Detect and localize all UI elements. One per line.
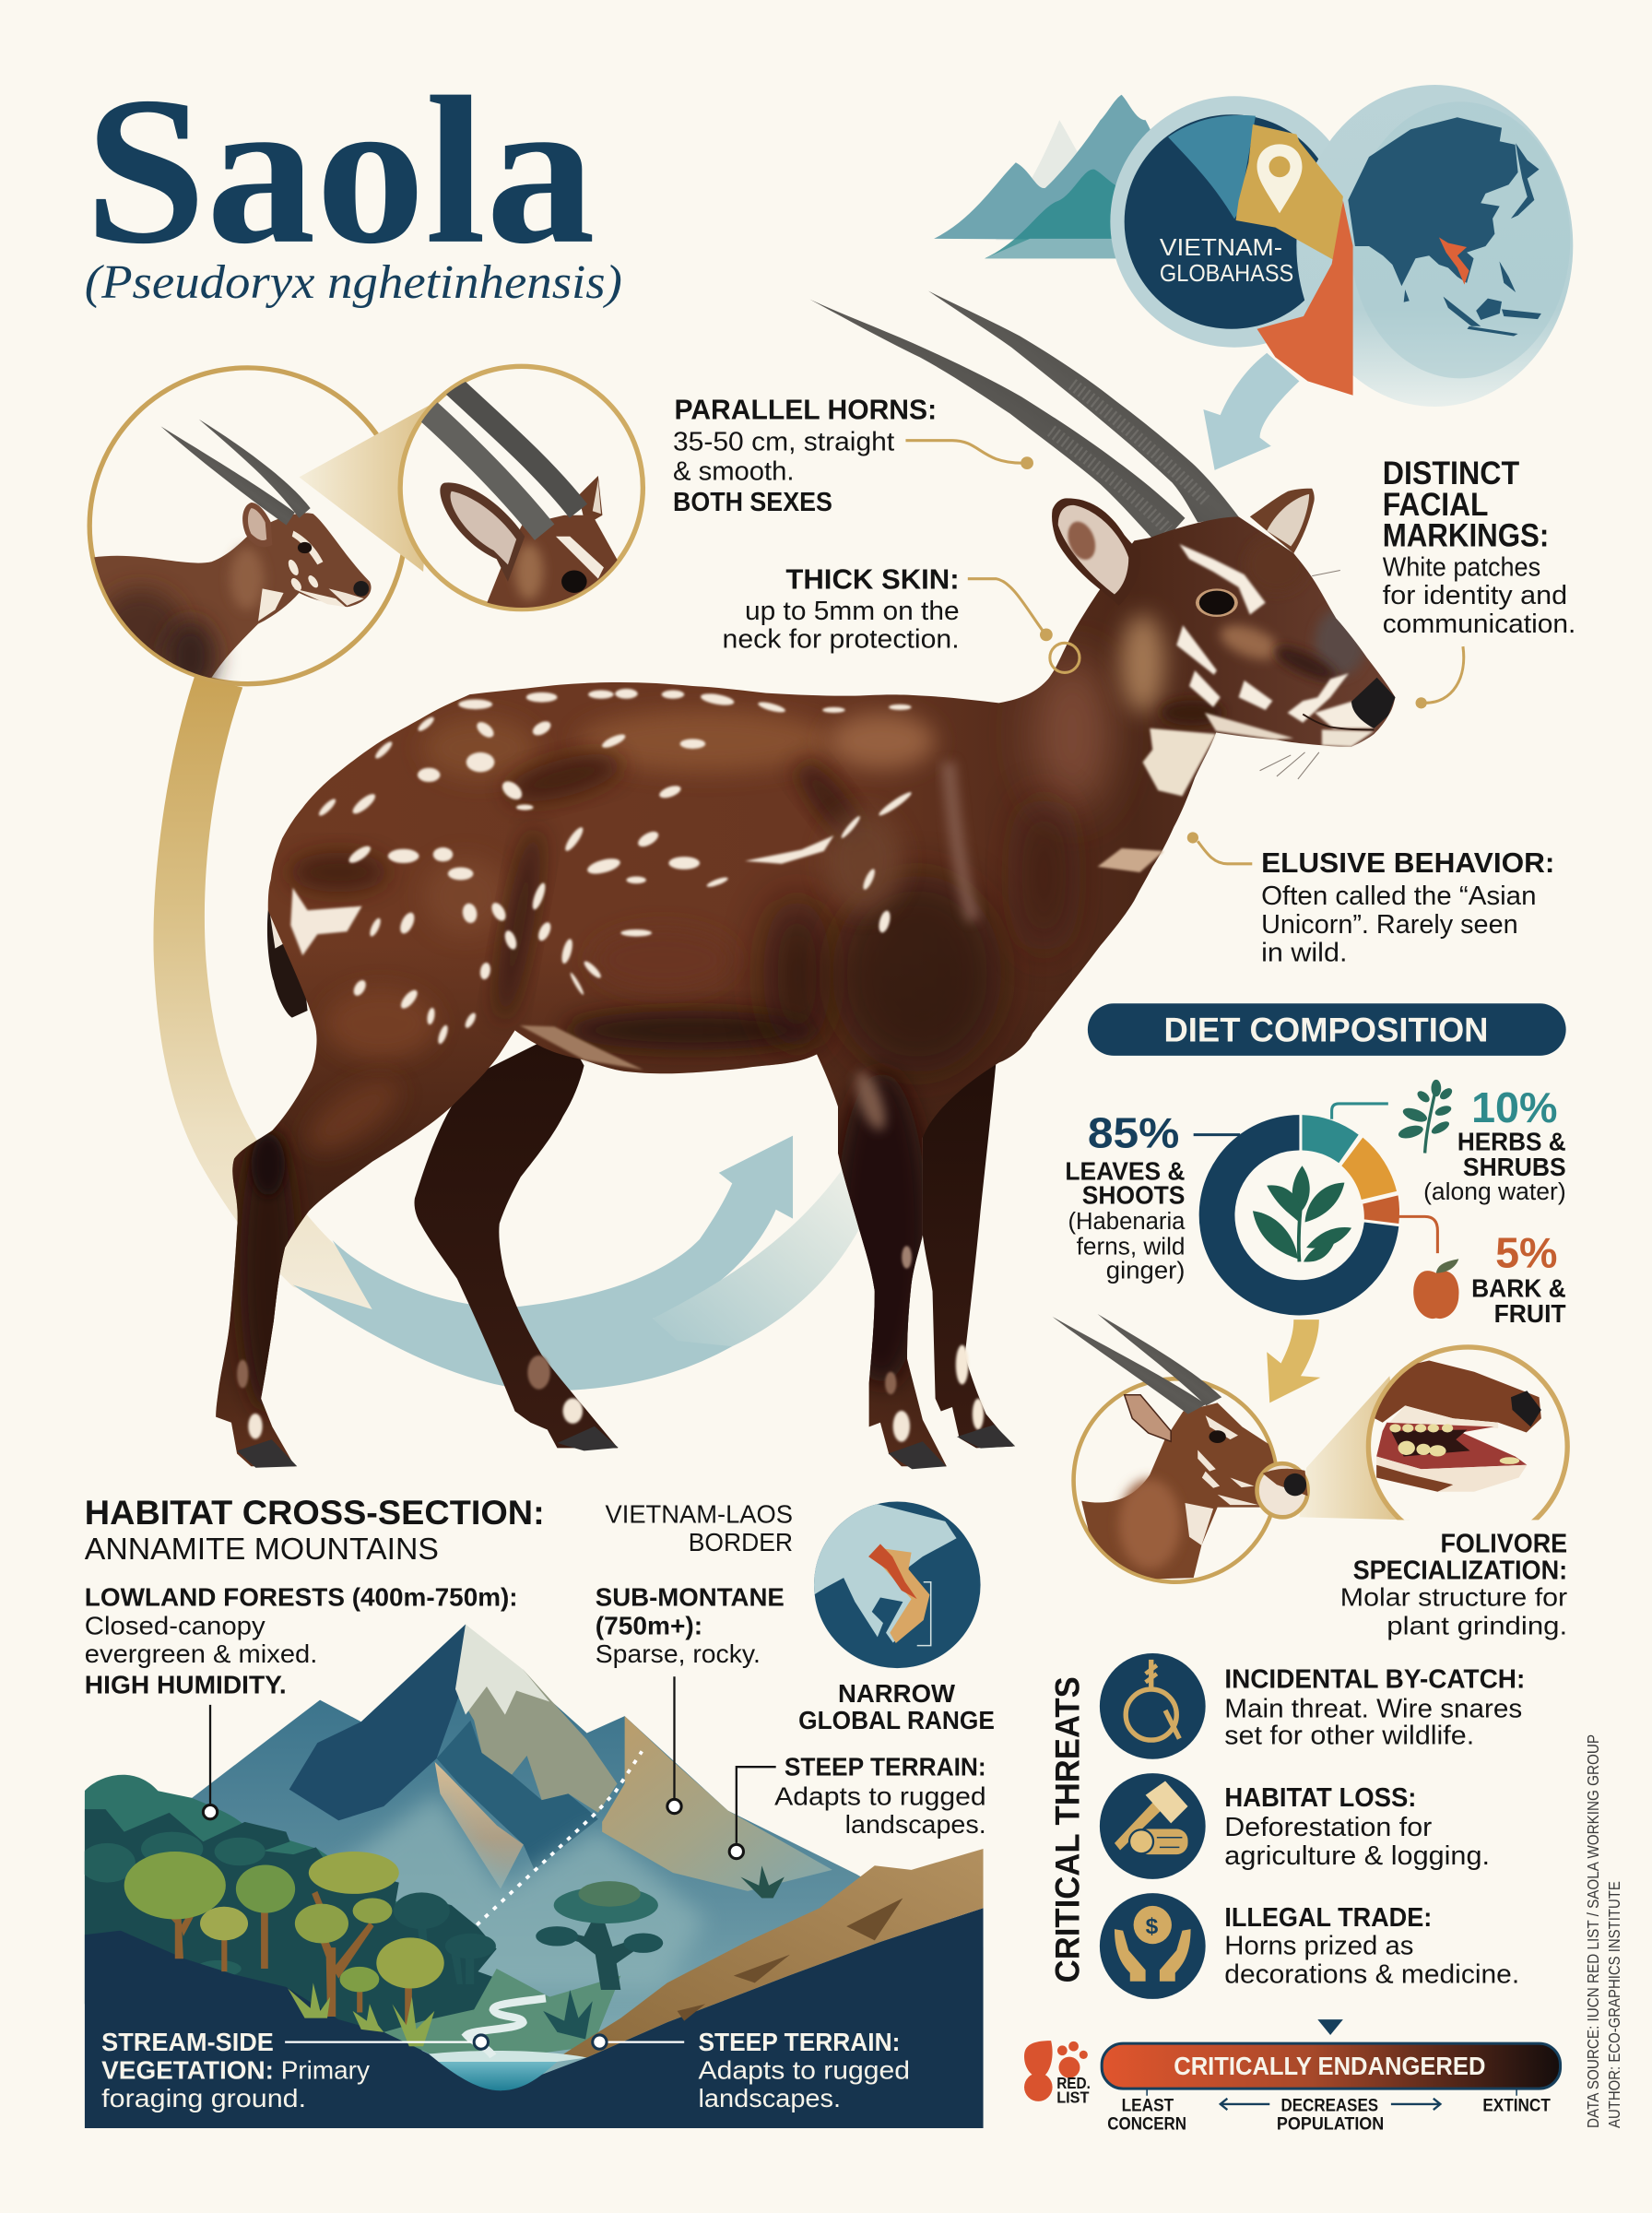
subtitle: scientific name: (Pseudoryx nghetinhensis) — [85, 256, 622, 309]
panel: habitat headings: HABITAT CROSS-SECTION: — [85, 1494, 545, 1532]
callout: folivore specialization: FOLIVORE — [1440, 1530, 1567, 1559]
icon: leaves in donut — [1253, 1166, 1351, 1262]
threat: illegal trade: Horns prized as — [1224, 1932, 1413, 1961]
callout: elusive behavior: Unicorn”. Rarely seen — [1261, 910, 1518, 940]
land on map — [814, 1501, 957, 1646]
callout: steep terrain upper — [729, 1752, 986, 1859]
tan right slope — [602, 1716, 832, 1891]
main saola illustration — [197, 290, 1395, 1482]
water pale shelf — [429, 2051, 587, 2062]
rock shadows — [678, 1899, 903, 2021]
label: 10% herbs and shrubs: HERBS & — [1457, 1127, 1566, 1155]
callout: parallel horns: PARALLEL HORNS: — [674, 395, 937, 426]
leg markings — [237, 1246, 984, 1442]
callout: folivore specialization — [1340, 1530, 1567, 1639]
callout: thick skin: THICK SKIN: — [785, 563, 960, 595]
back forest — [85, 1774, 396, 2005]
lake — [439, 2062, 557, 2090]
icon: herb — [1397, 1080, 1454, 1154]
horns in circle — [160, 420, 311, 526]
label: narrow global range: NARROW — [838, 1679, 955, 1708]
locator map: narrow global range — [814, 1501, 981, 1668]
callout: stream-side vegetation: VEGETATION: Primary — [101, 2055, 370, 2084]
callout: elusive behavior — [1187, 832, 1554, 967]
circle frame — [89, 368, 406, 684]
threat: illegal trade: ILLEGAL TRADE: — [1224, 1903, 1432, 1933]
diet heading pill — [1088, 1003, 1566, 1056]
icon: red list logo: LIST — [1056, 2088, 1090, 2106]
callout: distinct facial markings: for identity and — [1383, 581, 1567, 610]
habitat scene illustration — [79, 1625, 984, 2128]
map graphic: Vietnam global location — [934, 85, 1573, 407]
callout: steep terrain lower: STEEP TERRAIN: — [699, 2028, 900, 2056]
callout: parallel horns: BOTH SEXES — [673, 488, 832, 517]
arrow: globe down to saola — [1203, 353, 1299, 470]
main mountain — [85, 1625, 984, 2128]
label: 85% leaves and shoots: ferns, wild — [1077, 1233, 1185, 1260]
panel: habitat headings — [85, 1494, 793, 1567]
callout: elusive behavior: ELUSIVE BEHAVIOR: — [1261, 847, 1554, 879]
scale labels: EXTINCT — [1482, 2097, 1551, 2116]
label: 85% leaves and shoots — [1065, 1108, 1240, 1284]
orange slice — [1257, 201, 1353, 396]
diet heading pill: DIET COMPOSITION — [1164, 1012, 1488, 1049]
threat: habitat loss: HABITAT LOSS: — [1224, 1783, 1416, 1813]
threat: by-catch: Main threat. Wire snares — [1224, 1695, 1522, 1724]
callout: distinct facial markings: communication. — [1383, 609, 1575, 639]
credits — [1584, 1734, 1623, 2128]
scale labels: LEAST — [1122, 2097, 1174, 2116]
credits: DATA SOURCE: IUCN RED LIST / SAOLA WORKING GROUP — [1584, 1734, 1602, 2128]
threat: illegal trade — [1100, 1893, 1519, 1999]
callout: lowland forests: LOWLAND FORESTS (400m-750m): — [85, 1583, 518, 1612]
callout: distinct facial markings — [1383, 456, 1575, 708]
callout: folivore specialization: SPECIALIZATION: — [1353, 1556, 1567, 1586]
vertical heading: CRITICAL THREATS — [1049, 1676, 1087, 1982]
label: 5% bark and fruit: FRUIT — [1494, 1299, 1566, 1328]
map label: VIETNAM- — [1160, 233, 1282, 261]
callout: steep terrain lower: Adapts to rugged — [699, 2055, 910, 2084]
status bar: critically endangered: CRITICALLY ENDANGERED — [1174, 2052, 1485, 2080]
tan spur — [435, 1762, 524, 1889]
scale labels — [1107, 2089, 1551, 2134]
callout: thick skin: neck for protection. — [723, 625, 960, 655]
hooves — [237, 1425, 1015, 1469]
threat: illegal trade: $ — [1146, 1914, 1159, 1939]
far front leg — [923, 988, 1037, 1448]
zoom wedge to teeth — [1299, 1376, 1410, 1520]
Vietnam highlight — [1439, 237, 1469, 285]
forest canopy blobs — [79, 1832, 266, 1977]
horns — [809, 290, 1239, 546]
eye — [1196, 588, 1238, 617]
callout: thick skin: up to 5mm on the — [745, 597, 960, 626]
donut chart — [1199, 1115, 1399, 1315]
label: narrow global range: GLOBAL RANGE — [798, 1706, 995, 1734]
label: 10% herbs and shrubs: (along water) — [1423, 1178, 1566, 1205]
callout: stream-side vegetation: foraging ground. — [101, 2084, 306, 2112]
circle frame — [400, 366, 643, 609]
body shading — [197, 537, 1365, 1482]
scale labels: POPULATION — [1277, 2114, 1384, 2134]
body silhouette — [216, 516, 1395, 1466]
snow — [455, 1625, 549, 1715]
icon: red list logo: RED. — [1056, 2074, 1091, 2092]
label: 10% herbs and shrubs: 10% — [1471, 1083, 1557, 1131]
label: 85% leaves and shoots: 85% — [1088, 1108, 1179, 1156]
panel: habitat headings: ANNAMITE MOUNTAINS — [85, 1533, 439, 1567]
map label: GLOBAHASS — [1160, 259, 1293, 287]
stream — [466, 1998, 546, 2056]
callout: stream-side vegetation — [101, 2028, 488, 2112]
label: 85% leaves and shoots: LEAVES & — [1065, 1157, 1186, 1186]
panel: diet composition — [1065, 1003, 1566, 1328]
callout: lowland forests: evergreen & mixed. — [85, 1639, 317, 1668]
callout: parallel horns — [673, 395, 1033, 517]
savanna tree — [536, 1881, 663, 1990]
threat: habitat loss — [1100, 1773, 1490, 1879]
fern near stream — [543, 1990, 593, 2040]
label: 85% leaves and shoots: SHOOTS — [1082, 1181, 1185, 1210]
centre dark face — [437, 1721, 598, 1870]
dark left face — [289, 1625, 466, 1820]
globe pale disc — [1296, 85, 1573, 407]
valley hill — [384, 1969, 620, 2057]
location pin — [1257, 144, 1302, 213]
threat: habitat loss: Deforestation for — [1224, 1813, 1433, 1842]
arrow: diet to folivore — [1267, 1320, 1320, 1402]
callout: distinct facial markings: FACIAL — [1383, 487, 1488, 523]
callout: distinct facial markings: White patches — [1383, 553, 1540, 583]
face markings — [1098, 544, 1375, 872]
Asia landmass — [1348, 117, 1518, 286]
callout: steep terrain upper: Adapts to rugged — [774, 1782, 986, 1811]
callout: elusive behavior: Often called the “Asian — [1261, 882, 1537, 911]
nose — [1351, 678, 1395, 728]
callout: lowland forests: HIGH HUMIDITY. — [85, 1671, 287, 1699]
threat: illegal trade: decorations & medicine. — [1224, 1959, 1519, 1989]
body in circle — [85, 503, 372, 693]
threat: by-catch — [1100, 1653, 1525, 1759]
upper disc highlight — [1168, 115, 1256, 219]
far ear — [1250, 489, 1315, 553]
label: 85% leaves and shoots: ginger) — [1106, 1257, 1185, 1284]
callout: sub-montane — [596, 1583, 785, 1814]
whiskers — [1260, 570, 1340, 779]
near ear — [1052, 498, 1140, 606]
callout: distinct facial markings: MARKINGS: — [1383, 517, 1549, 553]
teeth detail circle — [1366, 1344, 1570, 1520]
small head horns — [1053, 1314, 1221, 1414]
callout: parallel horns: 35-50 cm, straight — [673, 427, 894, 456]
panel: habitat headings: BORDER — [689, 1528, 793, 1556]
callout: sub-montane: Sparse, rocky. — [596, 1639, 761, 1668]
detail circle: horn close-up — [400, 366, 643, 621]
teeth circle ring — [1368, 1347, 1567, 1546]
dark teal trees — [395, 1892, 496, 1947]
dotted altitude line — [477, 1751, 642, 1925]
callout: steep terrain upper: STEEP TERRAIN: — [785, 1752, 986, 1781]
white body spots — [290, 689, 914, 1045]
status marker triangle — [1317, 2019, 1343, 2035]
callout: sub-montane: (750m+): — [596, 1611, 702, 1639]
callout: stream-side vegetation: STREAM-SIDE — [101, 2028, 274, 2056]
arrow: gold arc from detail circle — [153, 676, 478, 1324]
label: 10% herbs and shrubs — [1332, 1083, 1566, 1205]
threat: habitat loss: agriculture & logging. — [1224, 1841, 1490, 1871]
panel: critical threats — [1049, 1653, 1525, 1999]
threat: by-catch: INCIDENTAL BY-CATCH: — [1224, 1664, 1525, 1694]
callout: sub-montane: SUB-MONTANE — [596, 1583, 785, 1612]
zoom wedge between circles — [299, 402, 434, 572]
grey-tan face — [455, 1670, 618, 1813]
small head circle — [1053, 1314, 1308, 1582]
small head illustration — [1081, 1394, 1274, 1579]
grass near rocks — [740, 1865, 785, 1899]
callout: thick skin — [723, 563, 1080, 672]
panel: habitat headings: VIETNAM-LAOS — [606, 1499, 793, 1528]
jaw illustration — [1362, 1360, 1541, 1492]
olive trees — [124, 1852, 444, 2025]
undergrowth — [288, 1982, 434, 2046]
callout: elusive behavior: in wild. — [1261, 938, 1347, 967]
label: 10% herbs and shrubs: SHRUBS — [1463, 1153, 1566, 1181]
status bar: critically endangered — [1102, 2043, 1561, 2089]
mouth — [1303, 715, 1375, 729]
callout: lowland forests — [85, 1583, 518, 1819]
gold wedge — [1236, 124, 1343, 261]
mountains beside the map — [934, 95, 1185, 258]
callout: folivore specialization: plant grinding. — [1386, 1611, 1567, 1639]
icon: red list logo — [1024, 2041, 1091, 2106]
callout: distinct facial markings: DISTINCT — [1383, 456, 1520, 491]
navy foreground — [85, 1908, 984, 2128]
callout: steep terrain lower: landscapes. — [699, 2084, 841, 2112]
arrow: blue arc into saola — [293, 1136, 859, 1391]
belly tuft — [520, 1025, 643, 1070]
map label — [1160, 233, 1293, 287]
scale labels: CONCERN — [1107, 2114, 1186, 2134]
brown rocks — [556, 1849, 984, 2059]
callout: steep terrain upper: landscapes. — [845, 1810, 986, 1839]
pale ring behind left disc — [1110, 96, 1359, 348]
threat: by-catch: set for other wildlife. — [1224, 1722, 1474, 1751]
label: 85% leaves and shoots: (Habenaria — [1068, 1207, 1186, 1235]
callout: parallel horns: & smooth. — [673, 457, 795, 487]
credits: AUTHOR: ECO-GRAPHICS INSTITUTE — [1605, 1881, 1623, 2128]
lower valley haze — [324, 1793, 705, 1990]
callout: steep terrain lower — [593, 2028, 910, 2112]
far hind leg — [415, 1030, 618, 1448]
callout: lowland forests: Closed-canopy — [85, 1611, 266, 1639]
Japan and islands — [1404, 143, 1541, 336]
icon: apple — [1413, 1259, 1458, 1319]
muzzle magnifier — [1257, 1463, 1308, 1517]
dark forest — [85, 1809, 549, 2051]
label: 5% bark and fruit: 5% — [1495, 1228, 1557, 1276]
label: 5% bark and fruit — [1398, 1216, 1566, 1328]
left disc — [1125, 114, 1339, 329]
callout: folivore specialization: Molar structure for — [1340, 1583, 1567, 1612]
title: Saola — [85, 53, 596, 288]
detail circle: full head — [85, 368, 406, 693]
globe inner disc — [1351, 101, 1570, 378]
label: narrow global range — [798, 1679, 995, 1734]
label: 5% bark and fruit: BARK & — [1471, 1274, 1566, 1303]
tail — [267, 904, 308, 1018]
scale labels: DECREASES — [1281, 2097, 1378, 2116]
